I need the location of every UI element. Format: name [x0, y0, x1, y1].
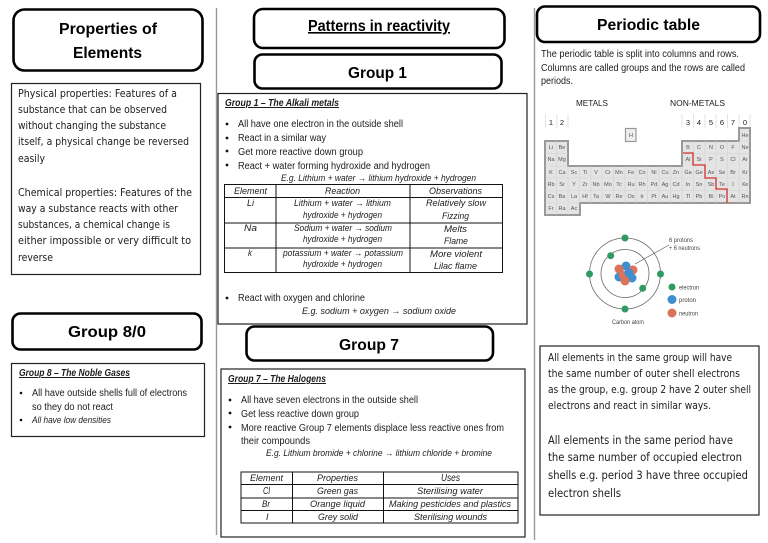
heading: Group 7: Group 7 — [339, 337, 399, 354]
panel: Group 1 alkali metals: Group 1 – The Alkali metals — [225, 98, 339, 109]
chart: periodic table: F — [731, 145, 735, 151]
chart: periodic table: Co — [638, 170, 646, 176]
table: halogen properties and uses: Making pesticides and plastics — [389, 499, 511, 510]
panel: Group 1 alkali metals: All have one electron in the outside shell — [238, 119, 403, 130]
chart: periodic table: Pb — [696, 194, 702, 200]
chart: periodic table: Pd — [651, 182, 657, 188]
chart: periodic table: Rn — [741, 194, 749, 200]
panel: Group 7 halogens: E.g. Lithium bromide + chlorine → lithium chloride + bromine — [266, 448, 492, 458]
chart: periodic table: Li — [549, 145, 553, 151]
chart: periodic table: Ar — [742, 157, 748, 163]
chart: periodic table: W — [605, 194, 611, 200]
chart: periodic table: Y — [572, 182, 576, 188]
chart: periodic table: O — [720, 145, 725, 151]
heading: Group 7 — [246, 326, 493, 360]
chart: periodic table: 0 — [743, 118, 747, 127]
table: alkali metal reactions: More violent — [430, 249, 482, 260]
chart: periodic table: V — [594, 170, 598, 176]
chart: periodic table: La — [571, 194, 578, 200]
heading: Patterns in reactivity: Patterns in reactivity — [308, 18, 450, 35]
chart: periodic table: 2 — [560, 118, 564, 127]
chart: periodic table: Sb — [708, 182, 714, 188]
chart: periodic table: Be — [559, 145, 565, 151]
diagram: carbon atom — [586, 234, 701, 326]
chart: periodic table: B — [686, 145, 690, 151]
heading: Periodic table — [537, 6, 760, 42]
chart: periodic table: Mo — [604, 182, 612, 188]
chart: periodic table: Br — [730, 170, 736, 176]
panel: groups and periods: the same number of occupied electron — [548, 450, 742, 464]
table: halogen properties and uses: Grey solid — [318, 512, 359, 523]
table: alkali metal reactions: potassium + water → potassium — [282, 248, 403, 258]
chart: periodic table: 5 — [709, 118, 713, 127]
chart: periodic table: Hg — [672, 194, 680, 200]
chart: periodic table: Ir — [640, 194, 644, 200]
chart: periodic table: Mn — [615, 170, 623, 176]
diagram: carbon atom: Carbon atom — [612, 319, 644, 326]
table: alkali metal reactions: Na — [244, 223, 257, 234]
panel: Group 7 halogens: All have seven electrons in the outside shell — [241, 395, 418, 406]
chart: periodic table: Cr — [605, 170, 611, 176]
chart: periodic table: 3 — [686, 118, 690, 127]
metal / non-metal dividing line — [683, 153, 727, 203]
heading: Patterns in reactivity — [254, 9, 504, 48]
chart: periodic table: Ba — [559, 194, 566, 200]
table: halogen properties and uses: I — [266, 512, 269, 523]
table: halogen properties and uses: Sterilising wounds — [414, 512, 487, 523]
panel: Group 1 alkali metals: React in a similar way — [238, 133, 326, 144]
table: alkali metal reactions: Melts — [444, 224, 467, 235]
chart: periodic table: Rh — [638, 182, 646, 188]
chart: periodic table: Mg — [558, 157, 566, 163]
chart: periodic table: Xe — [742, 182, 748, 188]
chart: periodic table: Se — [719, 170, 725, 176]
chart: periodic table: P — [709, 157, 713, 163]
panel: physical and chemical properties: without changing the substance — [18, 119, 166, 132]
heading: Group 1: Group 1 — [348, 65, 407, 82]
text block: periodic table intro: Columns are called groups and the rows are called — [541, 63, 745, 74]
chart: periodic table: Cs — [548, 194, 555, 200]
chart: periodic table: 6 — [720, 118, 724, 127]
chart: periodic table: Ra — [558, 206, 566, 212]
panel: Group 1 alkali metals: React + water forming hydroxide and hydrogen — [238, 161, 430, 172]
table: alkali metal reactions: Sodium + water → sodium — [294, 223, 392, 233]
panel: Group 7 halogens — [221, 369, 525, 537]
panel: groups and periods: electron shells — [548, 486, 621, 500]
panel: Group 7 halogens: More reactive Group 7 elements displace less reactive ones from — [241, 423, 504, 434]
labels: metals and non-metals: METALS — [576, 98, 608, 108]
panel: Group 1 alkali metals: E.g. sodium + oxygen → sodium oxide — [302, 306, 456, 317]
chart: periodic table: Nb — [592, 182, 600, 188]
diagram: carbon atom: + 6 neutrons — [669, 245, 701, 252]
panel: physical and chemical properties: substances, a chemical change is — [18, 218, 170, 231]
panel: physical and chemical properties: reverse — [18, 251, 53, 264]
chart: periodic table: Ta — [593, 194, 600, 200]
chart: periodic table: Pt — [651, 194, 657, 200]
diagram: carbon atom: 6 protons — [669, 237, 694, 244]
chart: periodic table: Po — [719, 194, 725, 200]
chart: periodic table: 7 — [731, 118, 735, 127]
chart: periodic table: Tl — [686, 194, 690, 200]
panel: Group 8 noble gases: All have outside shells full of electrons — [32, 388, 187, 399]
table: halogen properties and uses: Sterilising water — [417, 486, 484, 497]
panel: Group 7 halogens: their compounds — [241, 436, 310, 447]
table: halogen properties and uses: Green gas — [317, 486, 358, 497]
panel: groups and periods: electrons and react in similar ways. — [548, 399, 711, 412]
table: alkali metal reactions: Flame — [444, 236, 468, 247]
panel: physical and chemical properties: itself, a physical change be reversed — [18, 135, 189, 148]
table: alkali metal reactions: Lithium + water → lithium — [294, 198, 391, 208]
chart: periodic table: Ge — [695, 170, 703, 176]
chart: periodic table: As — [708, 170, 714, 176]
chart: periodic table: Al — [686, 157, 690, 163]
panel: physical and chemical properties: Chemical properties: Features of the — [18, 186, 192, 199]
panel: Group 7 halogens: Group 7 – The Halogens — [228, 374, 326, 385]
table: alkali metal reactions: Li — [247, 198, 255, 209]
chart: periodic table: Zr — [582, 182, 588, 188]
labels: metals and non-metals: NON-METALS — [670, 98, 725, 108]
chart: periodic table: 1 — [549, 118, 553, 127]
chart: periodic table: I — [732, 182, 734, 188]
chart: periodic table: S — [720, 157, 724, 163]
heading: Properties of Elements: Properties of — [59, 21, 158, 38]
chart: periodic table: Re — [615, 194, 623, 200]
legend: particles: neutron — [679, 310, 698, 318]
chart: periodic table: Ga — [684, 170, 693, 176]
text block: periodic table intro: The periodic table is split into columns and rows. — [541, 49, 739, 60]
legend: particles: proton — [679, 297, 696, 304]
heading: Group 8/0: Group 8/0 — [68, 324, 146, 341]
chart: periodic table: Ca — [558, 170, 566, 176]
chart: periodic table: Kr — [742, 170, 748, 176]
panel: physical and chemical properties: way a substance reacts with other — [18, 202, 178, 215]
chart: periodic table: 4 — [697, 118, 701, 127]
table: halogen properties and uses — [241, 472, 518, 523]
table: alkali metal reactions — [224, 184, 502, 272]
table: halogen properties and uses: Element — [250, 473, 283, 484]
panel: physical and chemical properties: substance that can be observed — [18, 103, 167, 116]
panel: Group 7 halogens: Get less reactive down group — [241, 409, 359, 420]
chart: periodic table: Ne — [741, 145, 749, 151]
legend: particles — [668, 284, 699, 318]
chart: periodic table — [545, 114, 750, 215]
chart: periodic table: Sc — [571, 170, 577, 176]
panel: physical and chemical properties: easily — [18, 152, 45, 165]
chart: periodic table: At — [730, 194, 736, 200]
chart: periodic table: Au — [662, 194, 668, 200]
table: alkali metal reactions: Element — [234, 186, 267, 197]
panel: Group 8 noble gases — [12, 364, 204, 436]
panel: Group 8 noble gases: Group 8 – The Noble Gases — [19, 368, 130, 379]
table: halogen properties and uses: Orange liquid — [310, 499, 366, 510]
chart: periodic table: Te — [719, 182, 725, 188]
chart: periodic table: C — [697, 145, 701, 151]
chart: periodic table: Hf — [582, 194, 588, 200]
table: alkali metal reactions: k — [248, 248, 253, 259]
chart: periodic table: K — [549, 170, 553, 176]
chart: periodic table: Bi — [709, 194, 713, 200]
table: alkali metal reactions: Fizzing — [442, 211, 470, 222]
panel: groups and periods: All elements in the same group will have — [548, 351, 732, 364]
table: halogen properties and uses: Br — [262, 499, 271, 510]
text block: periodic table intro: periods. — [541, 76, 573, 87]
table: alkali metal reactions: Relatively slow — [426, 198, 487, 209]
table: alkali metal reactions: Observations — [429, 186, 482, 197]
table: alkali metal reactions: hydroxide + hydrogen — [303, 210, 382, 220]
text block: periodic table intro — [541, 49, 745, 87]
panel: physical and chemical properties — [12, 84, 200, 274]
table: halogen properties and uses: Properties — [317, 473, 358, 484]
chart: periodic table: Cd — [672, 182, 680, 188]
chart: periodic table: Sn — [696, 182, 702, 188]
chart: periodic table: Ti — [583, 170, 587, 176]
panel: physical and chemical properties: either impossible or very difficult to — [18, 234, 191, 247]
heading: Periodic table: Periodic table — [597, 17, 700, 34]
panel: Group 8 noble gases: All have low densities — [31, 415, 111, 425]
chart: periodic table: Rb — [547, 182, 555, 188]
table: alkali metal reactions: Reaction — [325, 186, 360, 197]
table: alkali metal reactions: Lilac flame — [434, 261, 477, 272]
chart: periodic table: Na — [547, 157, 555, 163]
chart: periodic table: Fe — [628, 170, 634, 176]
panel: Group 1 alkali metals: Get more reactive down group — [238, 147, 363, 158]
panel: Group 1 alkali metals — [218, 94, 527, 324]
chart: periodic table: Sr — [559, 182, 565, 188]
chart: periodic table: Ru — [627, 182, 635, 188]
chart: periodic table: He — [741, 133, 749, 139]
chart: periodic table: In — [686, 182, 690, 188]
chart: periodic table: Cl — [730, 157, 736, 163]
chart: periodic table: Zn — [673, 170, 679, 176]
heading: Group 8/0 — [12, 314, 202, 350]
panel: Group 8 noble gases: so they do not react — [32, 402, 113, 413]
table: alkali metal reactions: hydroxide + hydrogen — [303, 234, 382, 244]
chart: periodic table: Si — [697, 157, 701, 163]
chart: periodic table: Fr — [548, 206, 554, 212]
chart: periodic table: H — [629, 133, 633, 139]
panel: Group 1 alkali metals: E.g. Lithium + water → lithium hydroxide + hydrogen — [281, 173, 476, 183]
chart: periodic table: Ni — [651, 170, 657, 176]
chart: periodic table: Ag — [662, 182, 668, 188]
chart: periodic table: N — [709, 145, 713, 151]
heading: Group 1 — [254, 54, 502, 88]
table: alkali metal reactions: hydroxide + hydrogen — [303, 259, 382, 269]
table: halogen properties and uses: Uses — [441, 473, 460, 484]
panel: Group 1 alkali metals: React with oxygen and chlorine — [238, 293, 365, 304]
chart: periodic table: Tc — [616, 182, 622, 188]
legend: particles: electron — [679, 284, 699, 292]
panel: groups and periods — [540, 346, 759, 515]
table: halogen properties and uses: Cl — [263, 486, 271, 497]
panel: physical and chemical properties: Physical properties: Features of a — [18, 87, 177, 100]
heading: Properties of Elements: Elements — [73, 45, 142, 62]
panel: groups and periods: All elements in the same period have — [548, 433, 733, 447]
labels: metals and non-metals — [576, 98, 725, 108]
heading: Properties of Elements — [14, 10, 202, 70]
chart: periodic table: Cu — [661, 170, 669, 176]
chart: periodic table: Ac — [571, 206, 577, 212]
chart: periodic table: Os — [627, 194, 635, 200]
